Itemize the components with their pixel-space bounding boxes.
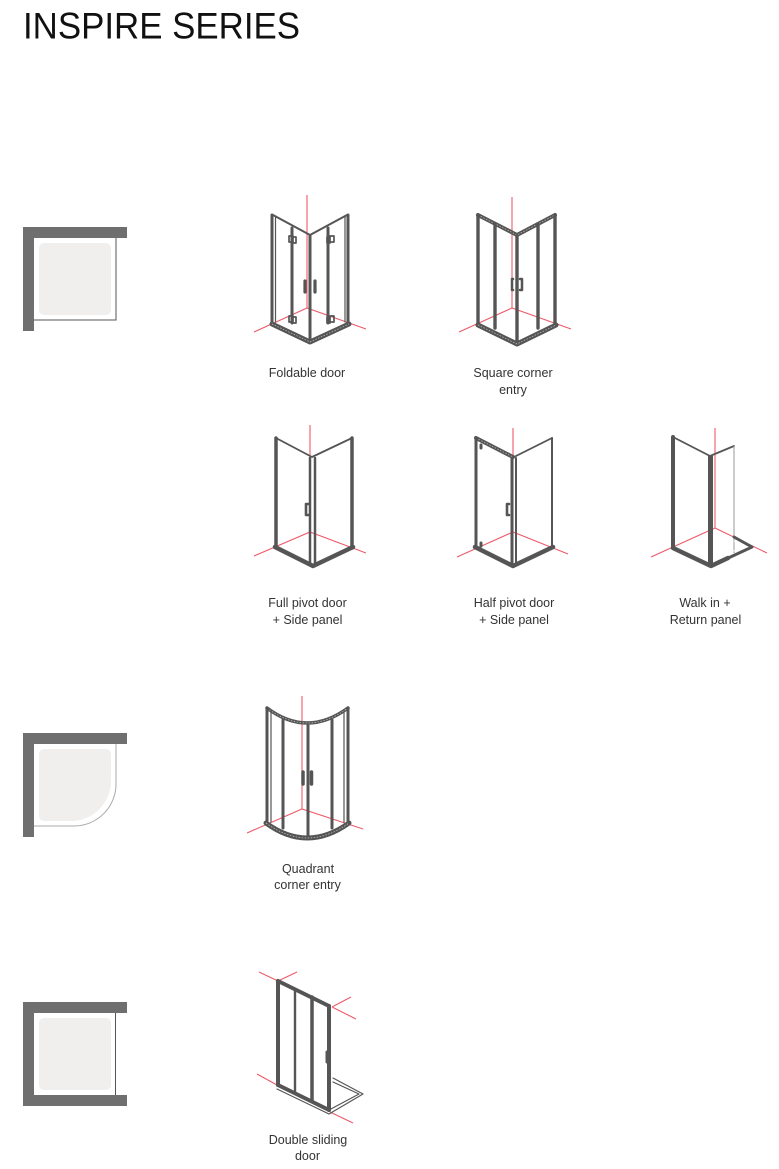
label: square corner entry <box>473 366 553 397</box>
diagram: half pivot door + side panel <box>457 428 568 566</box>
label: half pivot door + side panel: Half pivot door <box>474 596 554 610</box>
label: double sliding door: door <box>295 1149 320 1163</box>
label: quadrant corner entry: corner entry <box>274 878 342 892</box>
label: square corner entry: entry <box>499 383 528 397</box>
label: walk in + return panel <box>670 596 741 627</box>
diagram: full pivot door + side panel <box>254 425 366 566</box>
title: INSPIRE SERIES <box>23 6 300 46</box>
plan icon: recess <box>23 1002 127 1106</box>
label: full pivot door + side panel <box>268 596 347 627</box>
label: full pivot door + side panel: + Side panel <box>273 613 342 627</box>
label: half pivot door + side panel: + Side panel <box>479 613 549 627</box>
label: half pivot door + side panel <box>474 596 554 627</box>
label: walk in + return panel: Return panel <box>670 613 741 627</box>
label: walk in + return panel: Walk in + <box>679 596 731 610</box>
label: full pivot door + side panel: Full pivot door <box>268 596 347 610</box>
diagram: quadrant corner entry <box>247 696 363 838</box>
diagram: foldable door <box>254 195 366 342</box>
plan icon: quadrant <box>23 733 127 837</box>
plan icon: square corner <box>23 227 127 331</box>
diagram: square corner entry <box>459 197 571 344</box>
diagram: double sliding door <box>257 972 363 1123</box>
label: double sliding door <box>269 1133 347 1163</box>
label: quadrant corner entry <box>274 862 342 892</box>
label: double sliding door: Double sliding <box>269 1133 347 1147</box>
label: foldable door: Foldable door <box>269 366 345 380</box>
label: quadrant corner entry: Quadrant <box>282 862 335 876</box>
diagram: walk in + return panel <box>651 428 767 567</box>
label: square corner entry: Square corner <box>473 366 553 380</box>
